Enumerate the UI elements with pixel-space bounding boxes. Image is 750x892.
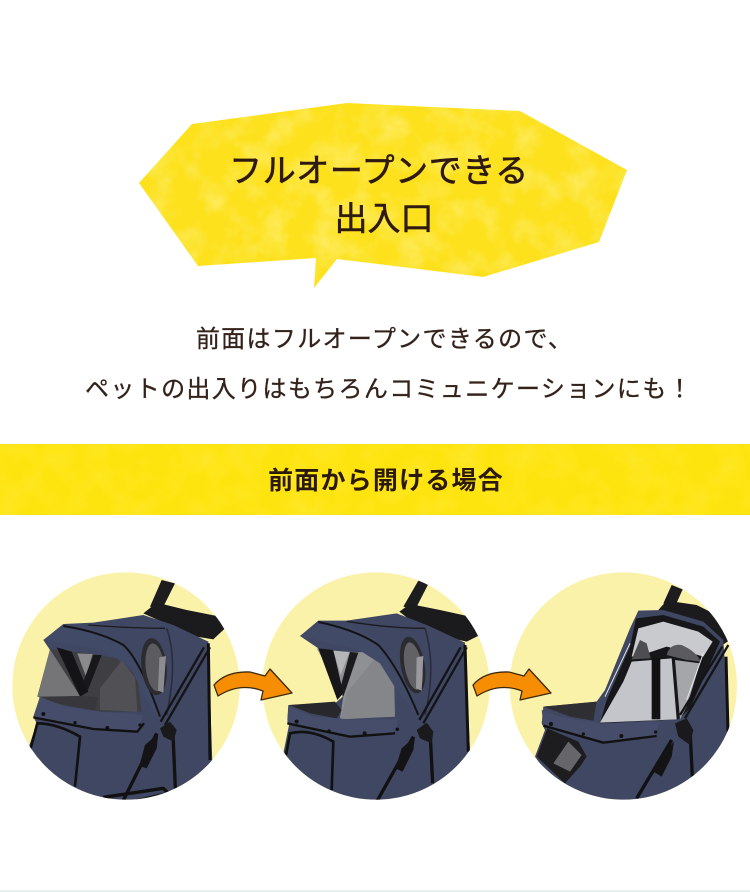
description line 1: 前面はフルオープンできるので、 bbox=[196, 326, 573, 353]
section heading: 前面から開ける場合 bbox=[268, 467, 504, 495]
section band bbox=[0, 444, 750, 515]
description line 2: ペットの出入りはもちろんコミュニケーションにも！ bbox=[85, 376, 693, 403]
title line 2: 出入口 bbox=[334, 200, 434, 237]
speech bubble with title bbox=[139, 103, 627, 288]
photo 3: front fully open bbox=[510, 572, 737, 800]
title line 1: フルオープンできる bbox=[229, 152, 529, 189]
photo 1: stroller closed bbox=[12, 572, 240, 800]
arrow 2 bbox=[472, 668, 552, 701]
arrow 1 bbox=[213, 668, 293, 701]
photo 2: front half open bbox=[263, 572, 490, 800]
